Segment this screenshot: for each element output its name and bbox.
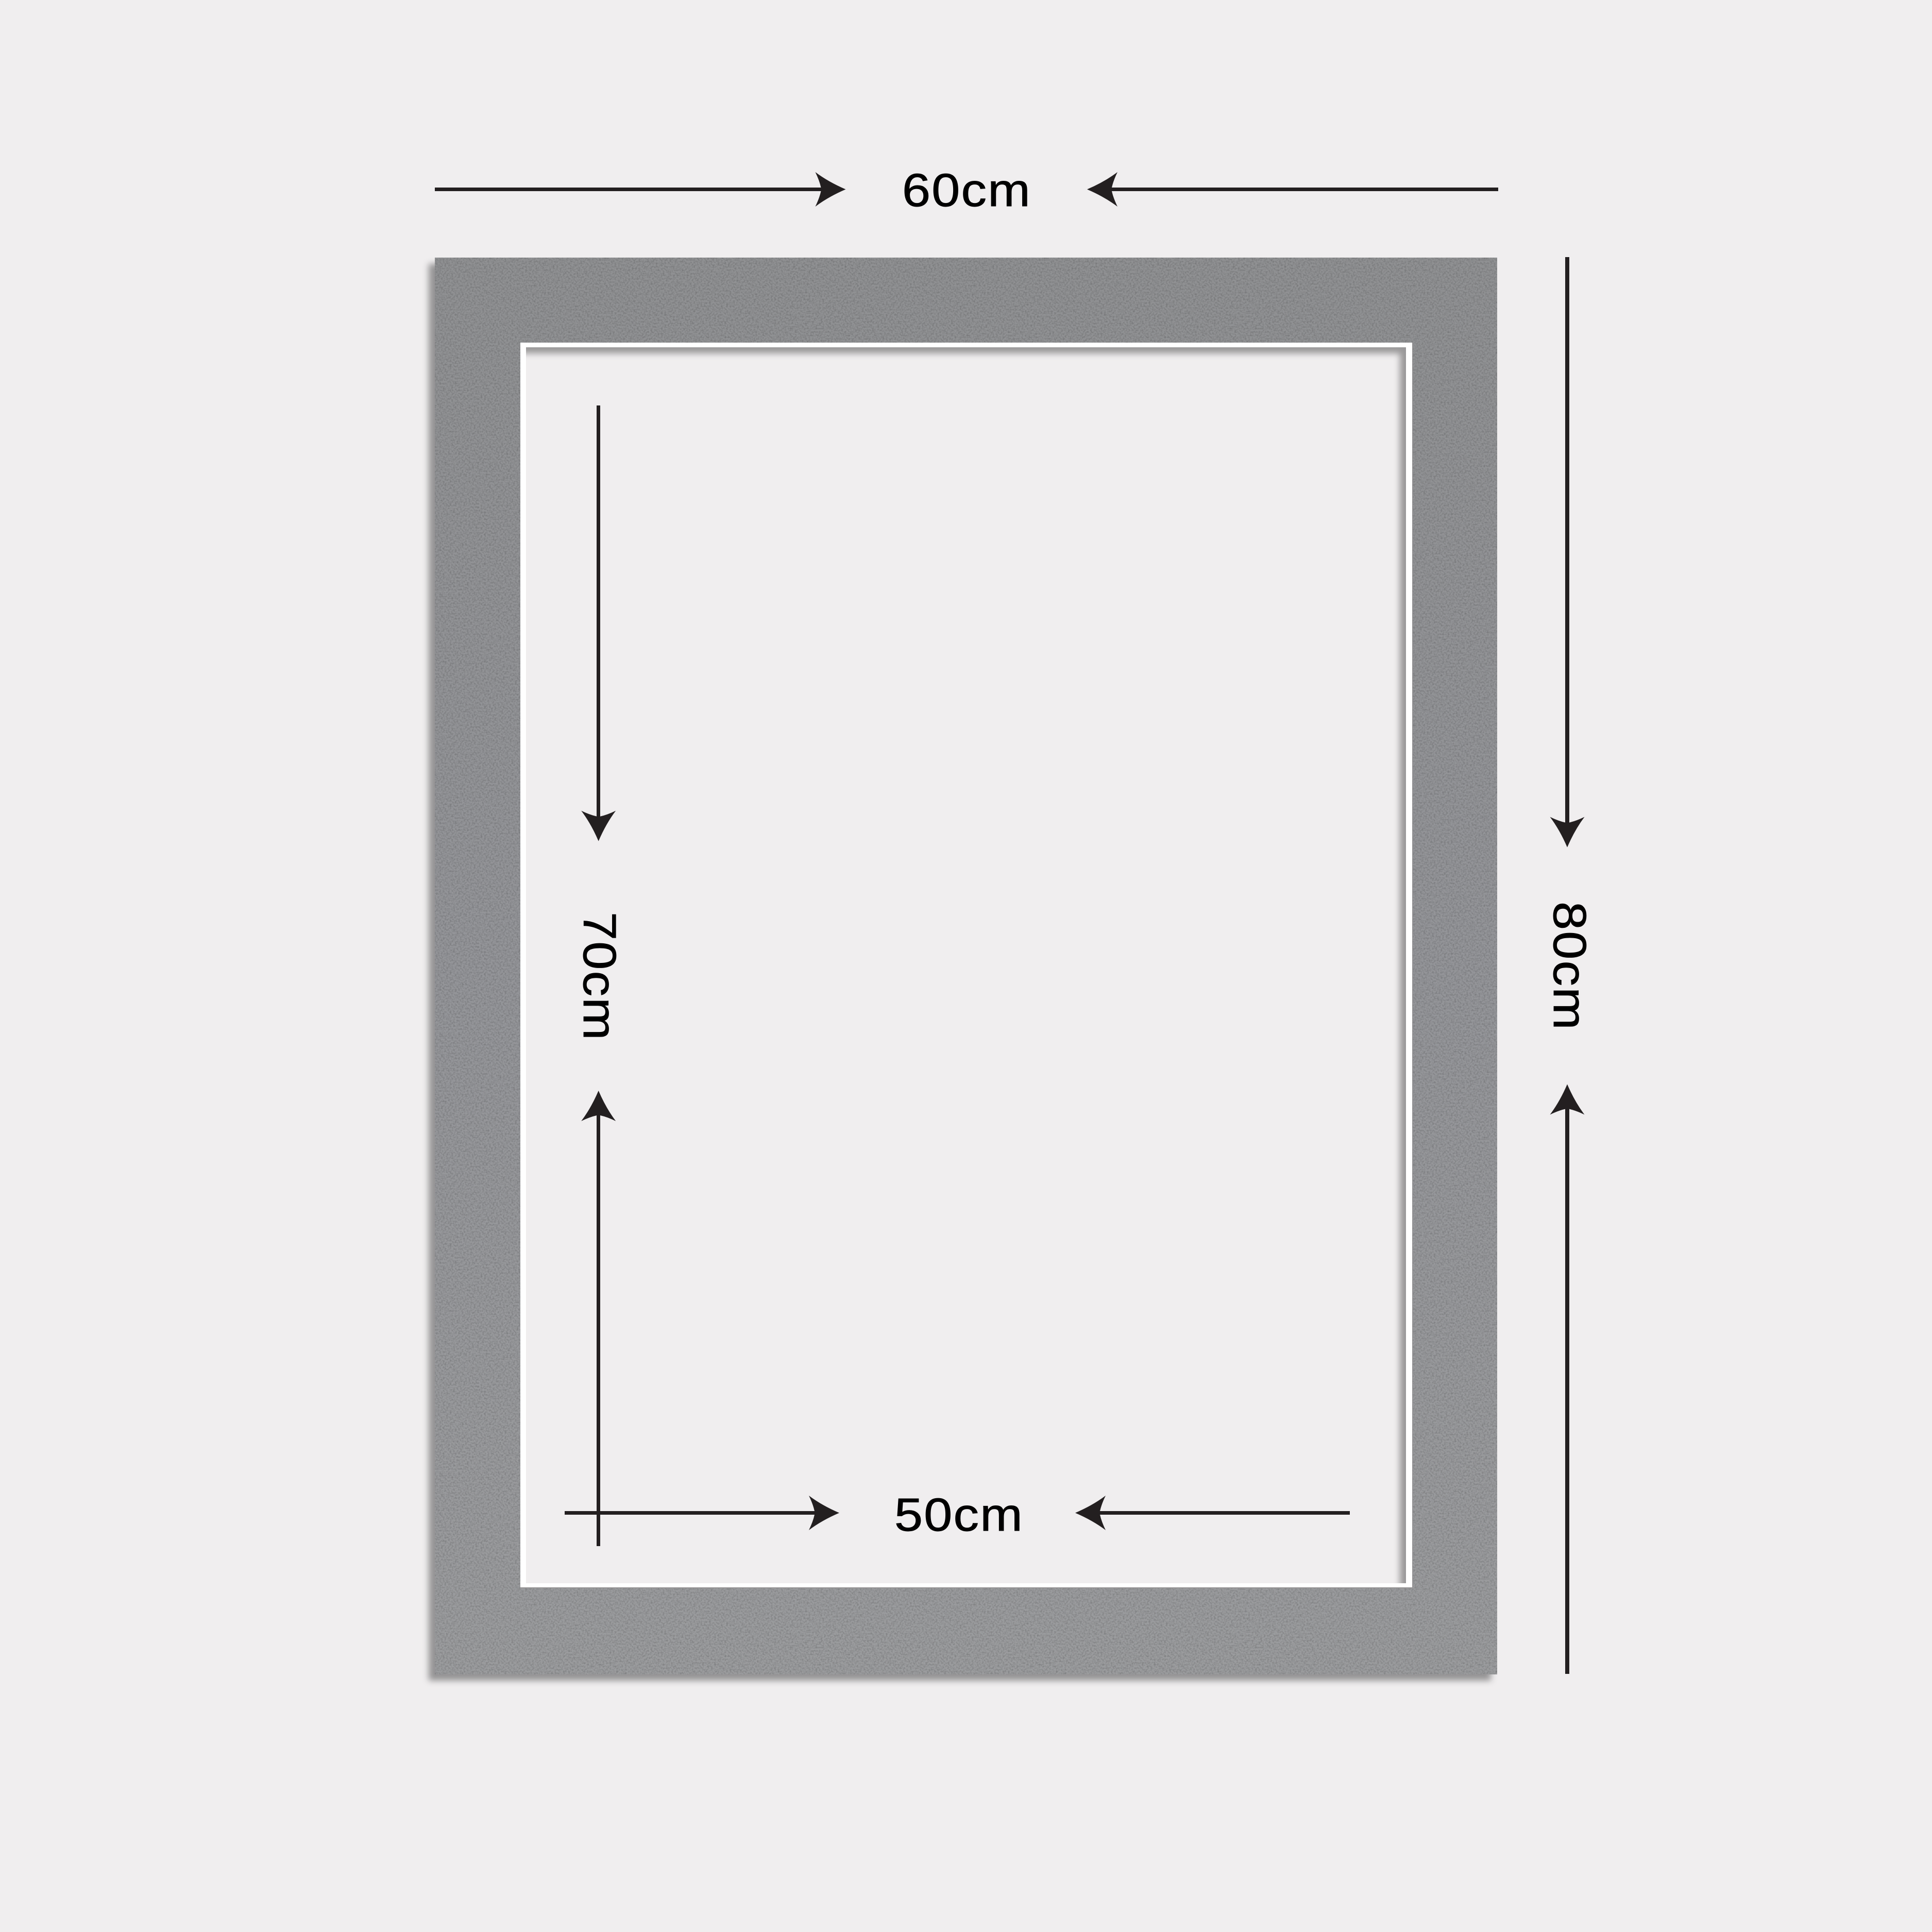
window opening	[526, 348, 1406, 1583]
arrow: inner width, right segment	[1075, 1496, 1350, 1530]
mat drop shadow	[429, 264, 1491, 1681]
panel: grey mat board with white bevel and shadows	[412, 232, 1520, 1700]
arrow: outer height, upper segment	[1550, 257, 1585, 848]
arrow: inner height, upper segment	[581, 405, 616, 841]
label: 70cm: 70cm	[573, 912, 625, 1041]
mat paper texture	[435, 258, 1497, 1674]
label: 80cm: 80cm	[1544, 902, 1596, 1031]
label: 60cm: 60cm	[902, 164, 1031, 216]
label: 50cm: 50cm	[894, 1489, 1024, 1541]
arrow: inner width, left segment	[565, 1496, 839, 1530]
white bevel	[520, 343, 1412, 1587]
mat board	[435, 258, 1497, 1674]
inner window shadow	[526, 347, 1406, 1583]
arrow: outer height, lower segment	[1550, 1084, 1585, 1674]
arrow: inner height, lower segment	[581, 1091, 616, 1546]
arrow: top width, left segment	[435, 172, 846, 207]
arrow: top width, right segment	[1087, 172, 1498, 207]
